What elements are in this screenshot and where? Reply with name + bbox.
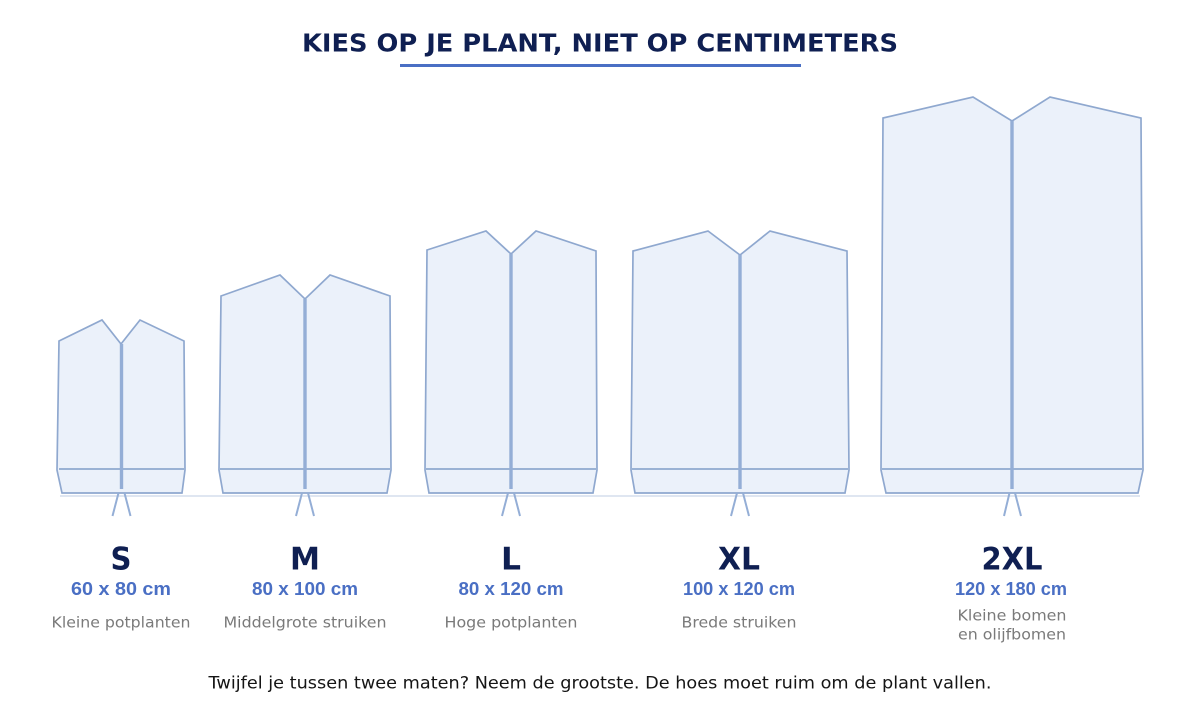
- label L: 80 x 120 cm: [458, 579, 564, 599]
- cover L: [425, 231, 597, 516]
- cover XL: [631, 231, 849, 516]
- cover 2XL: [881, 97, 1143, 516]
- label 2XL: [955, 542, 1067, 644]
- label XL: 100 x 120 cm: [683, 579, 795, 599]
- footer note: Twijfel je tussen twee maten? Neem de grootste. De hoes moet ruim om de plant vallen.: [207, 674, 992, 692]
- ground line: [60, 495, 1140, 497]
- label L: Hoge potplanten: [444, 614, 578, 632]
- cover M: [219, 275, 391, 516]
- title: KIES OP JE PLANT, NIET OP CENTIMETERS: [302, 28, 898, 58]
- label XL: [682, 542, 796, 632]
- label 2XL: 120 x 180 cm: [955, 579, 1067, 599]
- label S: Kleine potplanten: [52, 614, 190, 632]
- label 2XL: en olijfbomen: [958, 626, 1066, 644]
- label S: 60 x 80 cm: [71, 579, 171, 599]
- label L: [444, 542, 578, 632]
- title underline: [400, 64, 801, 67]
- label L: L: [501, 542, 521, 578]
- label M: Middelgrote struiken: [224, 614, 386, 632]
- label XL: Brede struiken: [682, 614, 796, 632]
- label M: 80 x 100 cm: [252, 579, 358, 599]
- label S: [52, 542, 190, 632]
- label 2XL: Kleine bomen: [958, 606, 1066, 624]
- label M: M: [290, 542, 320, 578]
- label 2XL: 2XL: [982, 542, 1042, 578]
- label XL: XL: [718, 542, 760, 578]
- label M: [224, 542, 386, 632]
- cover S: [57, 320, 185, 516]
- label S: S: [110, 542, 132, 578]
